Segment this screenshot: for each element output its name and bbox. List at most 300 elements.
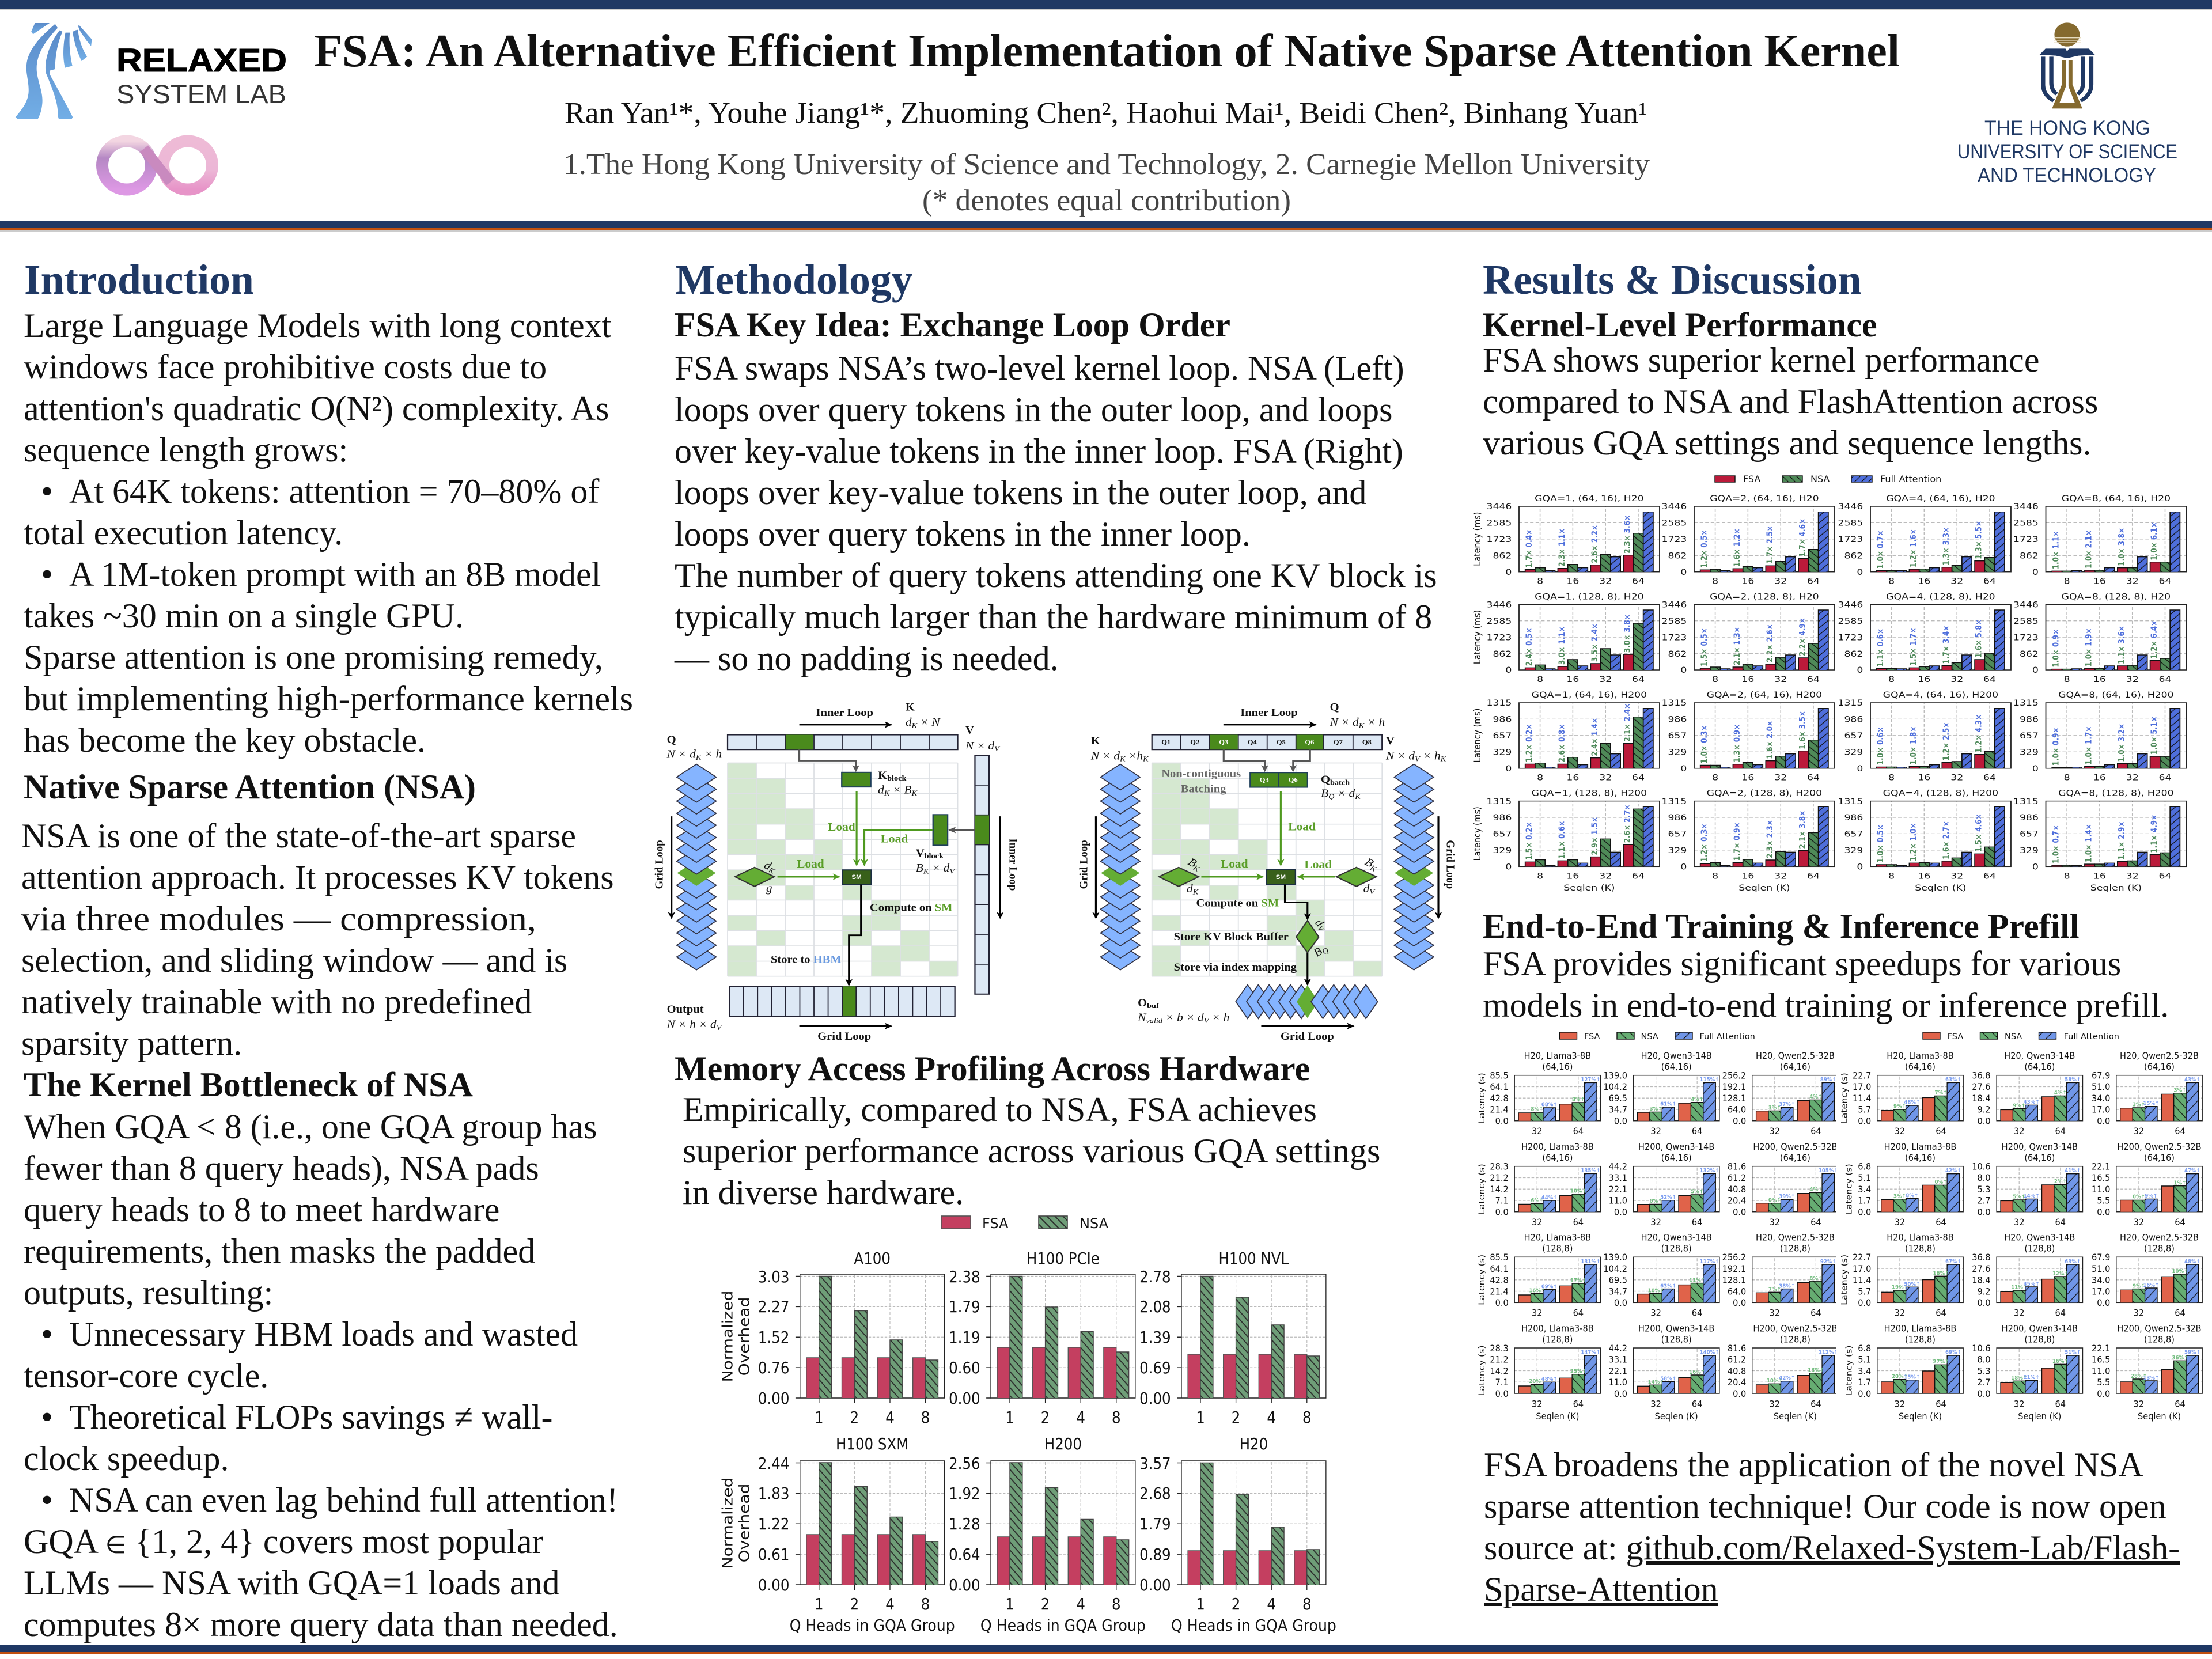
chart: H100 SXM: Q Heads in GQA Group	[790, 1617, 955, 1635]
text block: key idea: — so no padding is needed.	[674, 639, 1059, 677]
chart: H20 Qwen2.5-32B prefill (128,8): 0.0	[2097, 1298, 2110, 1308]
chart: H200 Llama3-8B (64,16): 14.2	[1490, 1184, 1509, 1195]
text block: bottleneck: •	[41, 1481, 53, 1519]
chart: GQA=8 (64,16) H20	[2013, 493, 2186, 586]
chart: H200 Llama3-8B prefill (128,8): 3.4	[1858, 1366, 1871, 1376]
chart: H200 Qwen2.5-32B (128,8): 112%↑	[1819, 1350, 1838, 1356]
text block: bottleneck: •	[41, 1315, 53, 1353]
chart: H100 NVL: 2.78	[1139, 1268, 1171, 1286]
text block: bottleneck: When GQA < 8 (i.e., one GQA group has	[24, 1108, 597, 1146]
chart: GQA=8 (128,8) H20	[2013, 592, 2186, 684]
chart: H20 Llama3-8B (64,16): Latency (s)	[1476, 1073, 1487, 1123]
chart: GQA=2 (128,8) H200: 32	[1774, 871, 1787, 881]
chart: H20 Llama3-8B prefill (64,16): (64,16)	[1905, 1061, 1936, 1072]
chart: H20 Llama3-8B (128,8): Latency (s)	[1476, 1255, 1487, 1305]
chart: H200 Qwen3-14B (128,8): Seqlen (K)	[1655, 1411, 1698, 1422]
text block: memory access: superior performance across various GQA settings	[683, 1132, 1380, 1170]
chart: GQA=2 (64,16) H200: 16	[1741, 772, 1754, 782]
chart: H200 Qwen2.5-32B (128,8)	[1728, 1323, 1838, 1422]
chart: H20 Llama3-8B prefill (128,8): 32	[1895, 1308, 1905, 1319]
text block: kernel-level: compared to NSA and FlashAttention across	[1483, 382, 2098, 421]
chart: H100 NVL: 8	[1302, 1409, 1312, 1427]
text block: intro: •	[41, 472, 53, 510]
chart: H200 Qwen2.5-32B prefill (64,16): 22.1	[2092, 1161, 2110, 1172]
chart: H100 PCIe: H100 PCIe	[1027, 1250, 1100, 1268]
chart: A100: 2	[850, 1409, 859, 1427]
chart: GQA=8 (64,16) H20: 8	[2064, 576, 2070, 586]
chart: H200 Qwen3-14B prefill (64,16): 10.6	[1972, 1161, 1991, 1172]
chart: H20 Qwen3-14B (128,8): H20, Qwen3-14B	[1641, 1232, 1712, 1243]
chart: H200 Qwen3-14B (64,16): 5%↑	[1691, 1189, 1703, 1195]
chart: H20 Qwen2.5-32B (64,16): 64	[1810, 1126, 1821, 1137]
chart: H20 memory: 4	[1267, 1596, 1276, 1613]
chart: GQA=1 (128,8) H200: 8	[1537, 871, 1543, 881]
text block: end-to-end: FSA provides significant speedups for various	[1483, 945, 2121, 983]
chart: H20 Qwen2.5-32B prefill (64,16): 34.0	[2092, 1093, 2110, 1104]
chart: H20 Qwen2.5-32B prefill (128,8): 32	[2134, 1308, 2144, 1319]
chart: H200 Qwen2.5-32B (128,8): 64	[1810, 1399, 1821, 1409]
chart: H200 Qwen3-14B prefill (64,16): 32	[2014, 1217, 2024, 1228]
Q batch: Q6	[1289, 776, 1298, 783]
chart: H20 Qwen3-14B prefill (64,16): 0.0	[1977, 1116, 1991, 1127]
text block: intro: Sparse attention is one promising remedy,	[24, 638, 603, 676]
chart: GQA=4 (64,16) H20: 16	[1918, 576, 1930, 586]
chart: H200 memory: Q Heads in GQA Group	[980, 1617, 1146, 1635]
chart: H20 Qwen3-14B (128,8): 104.2	[1603, 1263, 1627, 1274]
diagram labels: × h	[1420, 750, 1441, 762]
chart: H20 Llama3-8B (64,16): 8%↑	[1531, 1107, 1543, 1113]
chart: H200 Llama3-8B (128,8): 0.0	[1495, 1388, 1509, 1399]
chart: GQA=2 (64,16) H20: 16	[1741, 576, 1754, 586]
chart: H20 Llama3-8B (128,8): 21.4	[1490, 1286, 1509, 1297]
chart: H20 Llama3-8B prefill (64,16): 17.0	[1853, 1082, 1871, 1092]
chart: GQA=1 (128,8) H20: 8	[1537, 674, 1543, 684]
Q token bar: Q7	[1334, 738, 1343, 746]
chart: A100: A100	[854, 1250, 891, 1268]
header band	[0, 0, 2212, 232]
chart: H200 Qwen3-14B prefill (64,16)	[1972, 1141, 2083, 1228]
chart: GQA=1 (64,16) H20: 2585	[1486, 518, 1512, 528]
chart: A100: 3.03	[758, 1268, 789, 1286]
chart: H200 memory: 1.28	[949, 1516, 980, 1533]
chart: H200 Qwen3-14B prefill (64,16): (64,16)	[2024, 1152, 2055, 1163]
chart: H20 Qwen2.5-32B (128,8): 0.0	[1733, 1298, 1746, 1308]
diagram labels: Compute on SM	[870, 902, 953, 914]
chart: H20 Qwen2.5-32B prefill (64,16): 3%↑	[2133, 1102, 2145, 1108]
chart: H20 Qwen3-14B prefill (64,16): H20, Qwen3-14B	[2004, 1050, 2075, 1061]
chart: H200 Llama3-8B prefill (128,8): 32	[1895, 1399, 1905, 1409]
chart: H200 Qwen3-14B prefill (128,8): 10.6	[1972, 1343, 1991, 1354]
chart: H20 Llama3-8B prefill (64,16): 7%↑	[1935, 1090, 1947, 1096]
chart: GQA=4 (64,16) H200	[1838, 690, 2011, 782]
chart: GQA=1 (128,8) H20: 2.4× 0.5×	[1525, 628, 1535, 666]
chart: H200 Qwen3-14B prefill (64,16): 2.7	[1977, 1195, 1991, 1206]
chart: H200 Llama3-8B prefill (128,8)	[1844, 1323, 1963, 1422]
chart: GQA=1 (128,8) H200: Seqlen (K)	[1563, 882, 1615, 892]
chart: H200 Qwen2.5-32B (128,8): 20.4	[1728, 1377, 1746, 1388]
chart: H200 Qwen3-14B prefill (128,8): 51%↑	[2065, 1350, 2081, 1356]
diagram labels: V	[1415, 755, 1421, 763]
chart: H20 Qwen2.5-32B (128,8): 7%↑	[1768, 1287, 1781, 1293]
chart: GQA=8 (64,16) H200: 0	[2032, 763, 2039, 774]
chart: H200 memory: 1.92	[949, 1485, 980, 1503]
chart: GQA=8 (64,16) H20: 3446	[2013, 502, 2039, 512]
chart: GQA=1 (128,8) H200: 16	[1566, 871, 1579, 881]
chart: GQA=1 (128,8) H20: 2585	[1486, 616, 1512, 626]
chart: H20 Llama3-8B prefill (64,16): 5.7	[1858, 1104, 1871, 1115]
chart: H200 Qwen2.5-32B prefill (128,8): 22.1	[2092, 1343, 2110, 1354]
chart: H200 Qwen3-14B prefill (64,16): 0.0	[1977, 1207, 1991, 1218]
text block: kernel-level: various GQA settings and sequence lengths.	[1483, 424, 2091, 462]
chart: H200 Qwen2.5-32B prefill (64,16): 1%↑	[2174, 1180, 2186, 1187]
chart: H100 SXM: H100 SXM	[836, 1435, 908, 1453]
chart: H100 SXM: 0.00	[758, 1577, 789, 1594]
text block: intro: takes ~30 min on a single GPU.	[24, 597, 464, 635]
legend: memory charts	[941, 1215, 1109, 1232]
chart: H200 Qwen3-14B (128,8): 14%↑	[1648, 1380, 1664, 1385]
text block: closing statement: source at:	[1484, 1529, 1626, 1567]
chart: GQA=4 (128,8) H200: 64	[1983, 871, 1996, 881]
chart: GQA=1 (64,16) H20: 862	[1493, 551, 1512, 560]
chart: H100 PCIe: 1	[1005, 1409, 1014, 1427]
chart: H200 Llama3-8B (128,8): 28.3	[1490, 1343, 1509, 1354]
equal contribution note: (* denotes equal contribution)	[922, 184, 1291, 217]
text block: NSA: selection, and sliding window — and is	[21, 941, 567, 979]
chart: GQA=8 (128,8) H200: 16	[2093, 871, 2106, 881]
chart: H200 Llama3-8B prefill (128,8): (128,8)	[1905, 1334, 1936, 1344]
chart: H20 Llama3-8B (64,16): 32	[1532, 1126, 1543, 1137]
diagram labels	[653, 701, 1020, 1043]
chart: H20 Llama3-8B (64,16): 64	[1573, 1126, 1584, 1137]
chart: GQA=8 (64,16) H200: 1.0× 5.1×	[2150, 716, 2159, 755]
chart: GQA=4 (128,8) H20: 0	[1857, 665, 1863, 675]
diagram labels: K	[884, 789, 890, 797]
chart: GQA=4 (64,16) H20: 8	[1888, 576, 1895, 586]
chart: GQA=2 (128,8) H200: Seqlen (K)	[1738, 882, 1790, 892]
diagram labels: B	[1185, 856, 1199, 870]
chart: H20 Llama3-8B prefill (128,8): 16%↑	[1933, 1271, 1949, 1277]
text block: NSA: natively trainable with no predefined	[21, 983, 532, 1021]
title: FSA: An Alternative Efficient Implementation of Native Sparse Attention Kernel	[314, 26, 1900, 77]
chart: H100 PCIe: 1.19	[949, 1329, 980, 1347]
chart: H20 Qwen3-14B (128,8): 0.0	[1614, 1298, 1627, 1308]
chart: H200 Qwen3-14B prefill (128,8): Seqlen (K)	[2018, 1411, 2061, 1422]
chart: GQA=1 (128,8) H200: 64	[1632, 871, 1645, 881]
chart: GQA=4 (128,8) H200: 1315	[1838, 796, 1863, 806]
chart: A100: 0.00	[758, 1390, 789, 1408]
chart: H20 Qwen2.5-32B prefill (128,8): H20, Qwen2.5-32B	[2120, 1232, 2199, 1243]
text block: key idea: loops over query tokens in the outer loop, and loops	[675, 391, 1392, 429]
chart: A100: 0.76	[758, 1359, 789, 1377]
text block: bottleneck: fewer than 8 query heads), NSA pads	[24, 1149, 539, 1187]
diagram labels: Q	[1320, 946, 1330, 956]
chart: H200 Qwen3-14B (128,8): (128,8)	[1661, 1334, 1692, 1344]
chart: H20 memory: 2	[1232, 1596, 1240, 1613]
chart: GQA=8 (64,16) H200: 16	[2093, 772, 2106, 782]
chart: H200 Llama3-8B prefill (64,16): 5.1	[1858, 1173, 1871, 1183]
chart: H200 Qwen2.5-32B (64,16): 40.8	[1728, 1184, 1746, 1195]
chart: GQA=4 (128,8) H20: 3446	[1838, 600, 1863, 609]
chart: H200 Llama3-8B (64,16): 135%↑	[1581, 1168, 1600, 1174]
chart: A100: 1.52	[758, 1329, 789, 1347]
chart: GQA=1 (64,16) H200: 329	[1493, 747, 1512, 757]
footer band	[0, 1645, 2212, 1654]
chart: H20 Qwen2.5-32B prefill (64,16)	[2092, 1050, 2202, 1137]
legend: end-to-end training: NSA	[1641, 1032, 1658, 1041]
chart: H200 Qwen2.5-32B (64,16): (64,16)	[1780, 1152, 1810, 1163]
legend: end-to-end training: Full Attention	[1699, 1032, 1755, 1041]
chart: H20 Qwen3-14B (64,16): H20, Qwen3-14B	[1641, 1050, 1712, 1061]
diagram labels: K	[1142, 755, 1149, 763]
chart: GQA=8 (128,8) H20: 64	[2159, 674, 2171, 684]
chart: GQA=2 (64,16) H20: 1.6× 1.2×	[1733, 528, 1742, 567]
chart: GQA=4 (64,16) H200: 16	[1918, 772, 1930, 782]
chart: GQA=8 (64,16) H200: 1.0× 3.2×	[2117, 724, 2127, 762]
chart: H20 Qwen3-14B prefill (64,16): (64,16)	[2024, 1061, 2055, 1072]
chart: H200 Qwen2.5-32B prefill (64,16): 9%↑	[2145, 1194, 2157, 1199]
chart: H20 Llama3-8B (64,16): 64.1	[1490, 1082, 1509, 1092]
panel: results and discussion	[1471, 256, 2202, 1608]
diagram labels: × N	[917, 717, 941, 729]
chart: GQA=1 (64,16) H20: 0	[1505, 567, 1512, 577]
chart: H200 Qwen2.5-32B (128,8): 61.2	[1728, 1354, 1746, 1365]
diagram labels: × h	[1209, 1012, 1229, 1024]
chart: H20 Qwen3-14B prefill (64,16): 27.6	[1972, 1082, 1991, 1092]
chart: H200 Llama3-8B prefill (128,8): 69%↑	[1945, 1350, 1961, 1356]
chart: H20 Qwen3-14B prefill (64,16): 9%↑	[2013, 1103, 2025, 1109]
chart: GQA=4 (128,8) H200: 986	[1844, 813, 1863, 823]
chart: GQA=4 (64,16) H200: 986	[1844, 714, 1863, 724]
chart: GQA=2 (64,16) H200: 32	[1774, 772, 1787, 782]
chart: H20 Qwen3-14B (64,16): 104.2	[1603, 1082, 1627, 1092]
chart: A100: Overhead	[737, 1297, 753, 1376]
chart: GQA=4 (64,16) H20: 64	[1983, 576, 1996, 586]
chart: GQA=4 (128,8) H20: 8	[1888, 674, 1895, 684]
chart: GQA=4 (128,8) H200: 329	[1844, 846, 1863, 855]
chart: GQA=8 (128,8) H200: GQA=8, (128, 8), H200	[2058, 788, 2174, 798]
chart: GQA=8 (64,16) H20: 1723	[2013, 534, 2039, 544]
chart: H20 Qwen3-14B prefill (128,8): 0.0	[1977, 1298, 1991, 1308]
chart: GQA=8 (128,8) H20: 1.0× 0.9×	[2052, 629, 2061, 668]
chart: H20 Qwen2.5-32B prefill (128,8): 64	[2175, 1308, 2186, 1319]
chart: GQA=8 (64,16) H200: 8	[2064, 772, 2070, 782]
chart: GQA=8 (128,8) H20: 3446	[2013, 600, 2039, 609]
chart: GQA=1 (128,8) H200: 32	[1599, 871, 1612, 881]
chart: H20 Qwen2.5-32B prefill (64,16): 15%↑	[2143, 1101, 2159, 1107]
chart: H20 Llama3-8B prefill (128,8): 64	[1936, 1308, 1946, 1319]
chart: GQA=4 (64,16) H200: 8	[1888, 772, 1895, 782]
chart: GQA=2 (64,16) H200: 1315	[1661, 698, 1687, 708]
Q batch: Q3	[1260, 776, 1269, 783]
chart: H200 Qwen3-14B prefill (64,16): 5%↑	[2013, 1194, 2025, 1200]
chart: GQA=8 (64,16) H20: 1.0× 6.1×	[2150, 522, 2159, 560]
chart: GQA=8 (128,8) H200: Seqlen (K)	[2090, 882, 2142, 892]
text block: memory access: in diverse hardware.	[683, 1173, 964, 1211]
chart: H200 Qwen2.5-32B prefill (64,16): (64,16)	[2144, 1152, 2175, 1163]
chart: GQA=1 (128,8) H20: 3.0× 1.1×	[1558, 626, 1567, 665]
text block: bottleneck: LLMs — NSA with GQA=1 loads and	[24, 1564, 560, 1602]
chart: GQA=1 (128,8) H200: 2.9× 1.5×	[1590, 817, 1600, 855]
diagram labels: K	[1091, 735, 1101, 747]
chart: H20 Qwen3-14B prefill (128,8): 9.2	[1977, 1286, 1991, 1297]
text block: closing statement: FSA broadens the application of the novel NSA	[1484, 1446, 2143, 1484]
diagram labels: K	[1191, 863, 1202, 873]
diagram labels: Compute on SM	[1196, 897, 1279, 909]
text block: key idea: FSA swaps NSA’s two-level kernel loop. NSA (Left)	[675, 349, 1404, 387]
chart: GQA=1 (128,8) H20: 3.5× 2.4×	[1590, 623, 1600, 662]
text block: NSA: attention approach. It processes KV tokens	[21, 858, 614, 896]
chart: GQA=8 (64,16) H20: 862	[2020, 551, 2039, 560]
chart: GQA=2 (64,16) H200: 986	[1668, 714, 1687, 724]
chart: H200 Llama3-8B prefill (64,16): 0.0	[1858, 1207, 1871, 1218]
text block: intro: but implementing high-performance kernels	[24, 680, 633, 718]
chart: H200 Qwen2.5-32B prefill (128,8): 64	[2175, 1399, 2186, 1409]
chart: H20 Llama3-8B prefill (128,8): 17.0	[1853, 1263, 1871, 1274]
chart: H200 Llama3-8B (64,16): 10%↑	[1570, 1188, 1586, 1195]
chart: H20 Qwen3-14B (64,16): 69.5	[1609, 1093, 1627, 1104]
chart: H200 Llama3-8B prefill (128,8): 20%↑	[1892, 1374, 1908, 1380]
chart: GQA=1 (64,16) H200: 2.1× 2.4×	[1623, 703, 1633, 742]
subheading: end-to-end: End-to-End Training & Inference Prefill	[1483, 907, 2080, 945]
chart: H100 SXM: Normalized	[720, 1478, 736, 1569]
chart: GQA=4 (128,8) H200: 16	[1918, 871, 1930, 881]
chart: H20 Qwen2.5-32B (64,16): 192.1	[1722, 1082, 1746, 1092]
chart: GQA=8 (64,16) H20: GQA=8, (64, 16), H20	[2062, 493, 2171, 503]
chart: GQA=1 (64,16) H200: 1.2× 0.2×	[1525, 724, 1535, 762]
panel: introduction	[21, 256, 633, 1643]
chart: GQA=8 (128,8) H200: 64	[2159, 871, 2171, 881]
chart: H20 Qwen3-14B (64,16): 3%↑	[1650, 1107, 1662, 1112]
chart: H100 PCIe: 4	[1076, 1409, 1085, 1427]
chart: H20 Qwen2.5-32B prefill (64,16): 43%↑	[2184, 1077, 2200, 1083]
chart: GQA=1 (64,16) H20: 16	[1566, 576, 1579, 586]
diagram labels: K	[1440, 755, 1446, 763]
chart: GQA=1 (64,16) H200: 64	[1632, 772, 1645, 782]
chart: GQA=4 (64,16) H200: 1.2× 4.3×	[1975, 714, 1984, 753]
text block: intro: attention's quadratic O(N²) complexity. As	[24, 389, 609, 427]
chart: H200 Llama3-8B prefill (128,8): 5.1	[1858, 1354, 1871, 1365]
chart: GQA=8 (128,8) H20: 1.1× 3.6×	[2117, 626, 2127, 664]
chart: GQA=1 (64,16) H200: 657	[1493, 730, 1512, 741]
legend: inference prefill: NSA	[2005, 1032, 2022, 1041]
chart: H200 Qwen2.5-32B (64,16): 0.0	[1733, 1207, 1746, 1218]
chart: H20 Qwen2.5-32B prefill (128,8): 16%↑	[2143, 1283, 2159, 1289]
diagram labels: K	[911, 721, 918, 729]
diagram labels: Load	[1221, 858, 1248, 870]
chart: H20 Qwen2.5-32B prefill (64,16): H20, Qwen2.5-32B	[2120, 1050, 2199, 1061]
chart: H200 Qwen3-14B (128,8): 32	[1650, 1399, 1661, 1409]
chart: H20 Qwen3-14B prefill (64,16): 9.2	[1977, 1104, 1991, 1115]
chart: H200 Qwen2.5-32B (64,16): 4%↑	[1809, 1187, 1822, 1193]
chart: H200 Llama3-8B prefill (64,16): 64	[1936, 1217, 1946, 1228]
chart: H200 Llama3-8B prefill (64,16): (64,16)	[1905, 1152, 1936, 1163]
chart: H20 Qwen3-14B prefill (128,8): 32	[2014, 1308, 2024, 1319]
chart: GQA=1 (64,16) H20: 3446	[1486, 502, 1512, 512]
chart: H20 Llama3-8B prefill (64,16): Latency (s)	[1839, 1073, 1849, 1123]
text block: closing statement: sparse attention technique! Our code is now open	[1484, 1487, 2166, 1525]
chart: H20 memory: 0.00	[1139, 1577, 1171, 1594]
chart: H200 Qwen2.5-32B prefill (128,8): 13%↑	[2143, 1376, 2159, 1381]
chart: H200 Qwen3-14B (128,8): 0.0	[1614, 1388, 1627, 1399]
chart: H100 NVL: H100 NVL	[1219, 1250, 1289, 1268]
chart: H200 Qwen2.5-32B (128,8): 32	[1770, 1399, 1780, 1409]
chart: H100 SXM: 8	[921, 1596, 930, 1613]
chart: H200 Qwen3-14B prefill (128,8): 16%↑	[2052, 1359, 2069, 1365]
diagram labels: V	[1386, 735, 1395, 747]
chart: H200 Qwen3-14B prefill (64,16): 14%↑	[2024, 1194, 2040, 1199]
chart: GQA=8 (64,16) H200: 1.0× 0.9×	[2052, 728, 2061, 766]
chart: H20 Qwen2.5-32B prefill (128,8): 34.0	[2092, 1275, 2110, 1286]
chart: GQA=1 (64,16) H20: 64	[1632, 576, 1645, 586]
diagram labels: Output	[667, 1003, 704, 1016]
chart: H20 Qwen3-14B prefill (128,8): H20, Qwen3-14B	[2004, 1232, 2075, 1243]
chart: GQA=4 (128,8) H20: 1.6× 5.8×	[1975, 619, 1984, 658]
chart: H200 Llama3-8B (128,8): (128,8)	[1542, 1334, 1573, 1344]
diagram labels: V	[717, 1023, 722, 1032]
diagram labels: block	[925, 852, 944, 860]
diagram labels: Store to HBM	[771, 953, 842, 965]
chart: H200 Qwen2.5-32B (64,16)	[1728, 1141, 1838, 1228]
chart: GQA=8 (128,8) H200: 1.1× 4.9×	[2150, 815, 2159, 853]
chart: H20 Qwen3-14B prefill (64,16): 18.4	[1972, 1093, 1991, 1104]
chart: GQA=8 (128,8) H20: 862	[2020, 649, 2039, 658]
chart: GQA=1 (128,8) H200	[1471, 788, 1660, 892]
chart: H200 Qwen2.5-32B (128,8): 10%↑	[1767, 1378, 1783, 1384]
chart: GQA=1 (64,16) H20: 2.6× 2.2×	[1590, 525, 1600, 563]
chart: H100 PCIe	[949, 1250, 1135, 1427]
chart: H200 Llama3-8B prefill (64,16): 32	[1895, 1217, 1905, 1228]
Q token bar: Q8	[1362, 738, 1372, 746]
chart: GQA=4 (64,16) H20	[1838, 493, 2011, 586]
chart: H20 Llama3-8B (128,8): H20, Llama3-8B	[1524, 1232, 1591, 1243]
chart: H200 Qwen3-14B (64,16): (64,16)	[1661, 1152, 1692, 1163]
subheading: kernel-level: Kernel-Level Performance	[1483, 306, 1877, 344]
legend: memory charts: NSA	[1080, 1215, 1109, 1232]
chart: H100 NVL: 1	[1196, 1409, 1205, 1427]
chart: GQA=2 (64,16) H20: 1.7× 2.5×	[1766, 525, 1775, 564]
Q token bar: Q5	[1277, 738, 1286, 746]
chart: H20 Llama3-8B prefill (64,16): 32	[1895, 1126, 1905, 1137]
chart: H20 Qwen2.5-32B prefill (128,8): 9%↑	[2133, 1283, 2145, 1289]
chart: H20 Qwen3-14B prefill (64,16): 58%↑	[2065, 1077, 2081, 1083]
chart: GQA=4 (64,16) H200: GQA=4, (64, 16), H200	[1883, 690, 1998, 700]
chart: GQA=2 (128,8) H20: 2.2× 4.9×	[1798, 618, 1808, 656]
chart: H20 Llama3-8B prefill (128,8): 50%↑	[1904, 1282, 1920, 1287]
chart: H20 Qwen3-14B prefill (64,16): 64	[2055, 1126, 2066, 1137]
chart: H100 NVL: 2.08	[1139, 1298, 1171, 1316]
chart: H20 Qwen3-14B prefill (128,8): 36.8	[1972, 1252, 1991, 1263]
chart: H20 Llama3-8B prefill (64,16): 0.0	[1858, 1116, 1871, 1127]
chart: H20 memory: 0.89	[1139, 1546, 1171, 1564]
text block: intro: A 1M-token prompt with an 8B model	[69, 555, 601, 593]
diagram labels: Inner Loop	[1240, 707, 1298, 719]
chart: H200 memory: 8	[1112, 1596, 1121, 1613]
chart: GQA=4 (128,8) H20: GQA=4, (128, 8), H20	[1886, 592, 1995, 601]
diagram labels: V	[1369, 888, 1376, 896]
chart: GQA=1 (128,8) H200: GQA=1, (128, 8), H200	[1532, 788, 1647, 798]
white mask clipping third column	[1836, 1046, 1841, 1426]
chart: H100 PCIe: 0.60	[949, 1359, 980, 1377]
chart: H200 Llama3-8B prefill (64,16): 0%↑	[1935, 1180, 1947, 1185]
chart: GQA=2 (128,8) H200: 1.7× 0.9×	[1733, 823, 1742, 861]
chart: H20 Qwen3-14B (64,16): 61%↑	[1660, 1101, 1676, 1108]
chart: H200 Llama3-8B (128,8): 147%↑	[1581, 1350, 1600, 1356]
chart: H20 Llama3-8B prefill (64,16): 11.4	[1853, 1093, 1871, 1104]
chart: H200 Qwen2.5-32B (64,16): 61.2	[1728, 1173, 1746, 1183]
chart: GQA=4 (64,16) H20: 2585	[1838, 518, 1863, 528]
diagram labels: Load	[828, 821, 855, 834]
chart: GQA=4 (64,16) H20: 0	[1857, 567, 1863, 577]
